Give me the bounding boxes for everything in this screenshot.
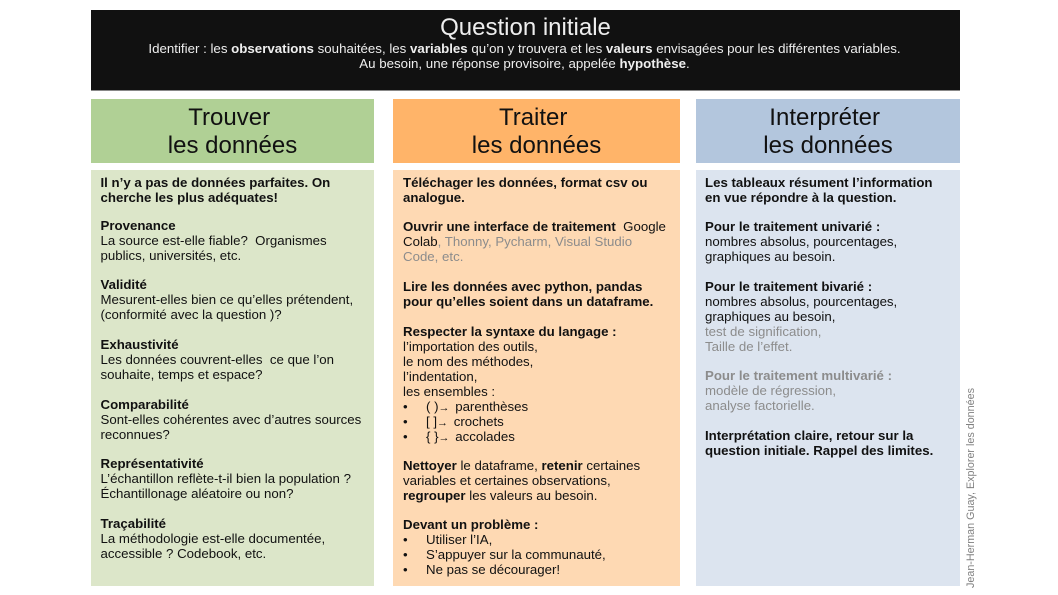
question description <box>148 41 901 71</box>
syntaxe du langage: [ ]→ crochets <box>426 414 504 429</box>
traitement univarié: graphiques au besoin. <box>705 249 835 264</box>
interprétation: question initiale. Rappel des limites. <box>705 443 933 458</box>
nettoyer: Nettoyer le dataframe, retenir certaines <box>403 458 640 473</box>
traitement multivarié: Pour le traitement multivarié : <box>705 368 892 383</box>
panel: traiter les données <box>393 170 680 586</box>
syntaxe du langage: le nom des méthodes, <box>403 354 533 369</box>
comparabilité: reconnues? <box>100 427 170 442</box>
traitement bivarié: Taille de l’effet. <box>705 339 792 354</box>
comparabilité: Comparabilité <box>100 397 189 412</box>
traitement bivarié <box>705 279 897 354</box>
nettoyer: variables et certaines observations, <box>403 473 611 488</box>
devant un problème: Ne pas se décourager! <box>426 562 560 577</box>
interface de traitement: Colab, Thonny, Pycharm, Visual Studio <box>403 234 632 249</box>
syntaxe du langage: l’indentation, <box>403 369 477 384</box>
traitement univarié <box>705 219 897 264</box>
panel: trouver les données <box>91 170 374 586</box>
interface de traitement: Code, etc. <box>403 249 463 264</box>
exhaustivité: souhaite, temps et espace? <box>100 367 263 382</box>
exhaustivité: Les données couvrent-elles ce que l’on <box>100 352 334 367</box>
devant un problème: S’appuyer sur la communauté, <box>426 547 606 562</box>
exhaustivité <box>100 337 334 382</box>
question description: Identifier : les observations souhaitées, les variables qu’on y trouvera et les valeurs envisagées pour les différentes variables. <box>148 41 901 56</box>
heading: traiter <box>393 99 680 163</box>
traitement bivarié: nombres absolus, pourcentages, <box>705 294 897 309</box>
provenance <box>100 218 327 263</box>
traitement bivarié: graphiques au besoin, <box>705 309 835 324</box>
lire les données <box>403 279 653 309</box>
traçabilité: accessible ? Codebook, etc. <box>100 546 266 561</box>
traitement multivarié: modèle de régression, <box>705 383 836 398</box>
représentativité: Échantillonage aléatoire ou non? <box>100 486 294 501</box>
validité <box>100 277 353 322</box>
interprétation <box>705 428 933 458</box>
représentativité: L’échantillon reflète-t-il bien la population ? <box>100 471 351 486</box>
nettoyer: regrouper les valeurs au besoin. <box>403 488 597 503</box>
interface de traitement: Ouvrir une interface de traitement Google <box>403 219 666 234</box>
credit: Jean-Herman Guay, Explorer les données <box>965 388 977 588</box>
intro: cherche les plus adéquates! <box>100 190 278 205</box>
devant un problème <box>403 517 606 577</box>
panel: question initiale <box>91 10 960 91</box>
heading: trouver <box>91 99 374 163</box>
heading: traiter: Traiter <box>499 104 567 131</box>
intro <box>100 175 330 205</box>
comparabilité: Sont-elles cohérentes avec d’autres sources <box>100 412 361 427</box>
devant un problème: Utiliser l’IA, <box>426 532 492 547</box>
traitement univarié: Pour le traitement univarié : <box>705 219 880 234</box>
syntaxe du langage: • <box>403 429 408 444</box>
traitement multivarié: analyse factorielle. <box>705 398 815 413</box>
interface de traitement <box>403 219 666 264</box>
heading: trouver: les données <box>168 132 297 159</box>
panel: interpréter les données <box>696 170 960 586</box>
télécharger: Téléchager les données, format csv ou <box>403 175 647 190</box>
intro: Il n’y a pas de données parfaites. On <box>100 175 330 190</box>
validité: Mesurent-elles bien ce qu’elles prétendent, <box>100 292 353 307</box>
lire les données: pour qu’elles soient dans un dataframe. <box>403 294 653 309</box>
syntaxe du langage <box>403 324 617 444</box>
devant un problème: • <box>403 562 408 577</box>
heading: traiter: les données <box>472 132 601 159</box>
interprétation: Interprétation claire, retour sur la <box>705 428 913 443</box>
syntaxe du langage: • <box>403 399 408 414</box>
validité: (conformité avec la question )? <box>100 307 282 322</box>
heading: interpréter <box>696 99 960 163</box>
heading: interpréter: les données <box>763 132 893 159</box>
syntaxe du langage: les ensembles : <box>403 384 495 399</box>
provenance: publics, universités, etc. <box>100 248 241 263</box>
nettoyer <box>403 458 640 503</box>
traitement bivarié: Pour le traitement bivarié : <box>705 279 872 294</box>
syntaxe du langage: { }→ accolades <box>426 429 515 444</box>
traitement multivarié <box>705 368 892 413</box>
représentativité <box>100 456 351 501</box>
traitement univarié: nombres absolus, pourcentages, <box>705 234 897 249</box>
heading: trouver: Trouver <box>188 104 270 131</box>
provenance: Provenance <box>100 218 176 233</box>
validité: Validité <box>100 277 147 292</box>
syntaxe du langage: Respecter la syntaxe du langage : <box>403 324 617 339</box>
traçabilité: Traçabilité <box>100 516 166 531</box>
télécharger: analogue. <box>403 190 465 205</box>
devant un problème: Devant un problème : <box>403 517 538 532</box>
comparabilité <box>100 397 361 442</box>
syntaxe du langage: ( )→ parenthèses <box>426 399 528 414</box>
exhaustivité: Exhaustivité <box>100 337 179 352</box>
tableaux: Les tableaux résument l’information <box>705 175 933 190</box>
traçabilité <box>100 516 325 561</box>
title: Question initiale <box>440 14 611 41</box>
devant un problème: • <box>403 532 408 547</box>
télécharger <box>403 175 647 205</box>
provenance: La source est-elle fiable? Organismes <box>100 233 327 248</box>
traçabilité: La méthodologie est-elle documentée, <box>100 531 325 546</box>
question description: Au besoin, une réponse provisoire, appelée hypothèse. <box>359 56 690 71</box>
tableaux: en vue répondre à la question. <box>705 190 896 205</box>
représentativité: Représentativité <box>100 456 204 471</box>
heading: interpréter: Interpréter <box>769 104 880 131</box>
syntaxe du langage: • <box>403 414 408 429</box>
traitement bivarié: test de signification, <box>705 324 821 339</box>
syntaxe du langage: l’importation des outils, <box>403 339 538 354</box>
tableaux <box>705 175 933 205</box>
lire les données: Lire les données avec python, pandas <box>403 279 642 294</box>
devant un problème: • <box>403 547 408 562</box>
